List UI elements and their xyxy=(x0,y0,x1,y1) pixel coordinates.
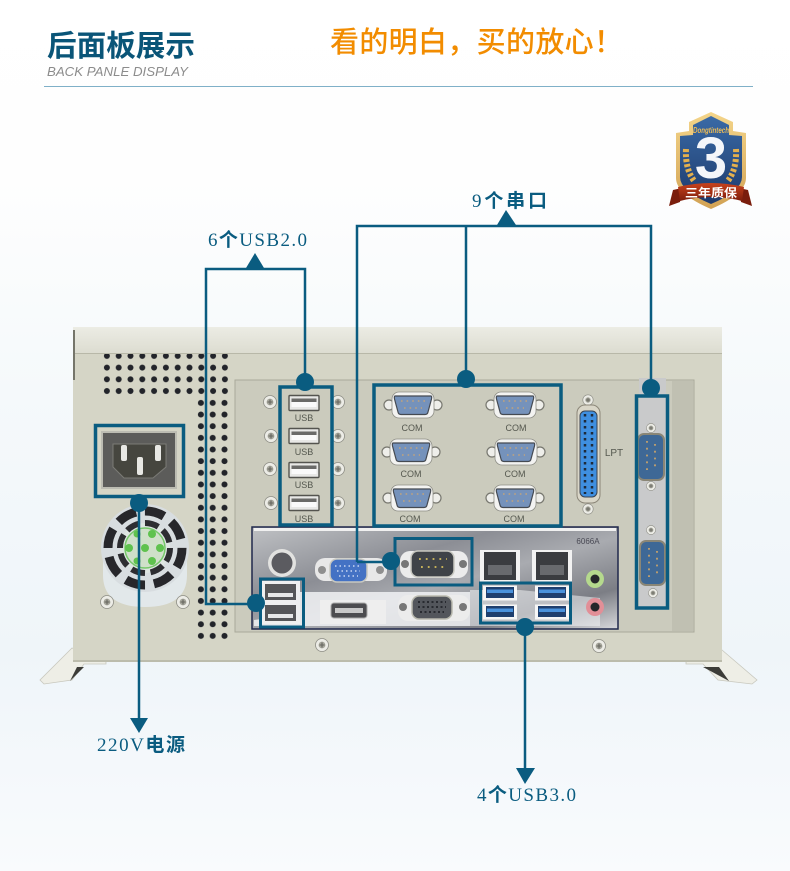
PS/2 port xyxy=(268,549,296,577)
VGA port blue xyxy=(315,558,387,582)
DB9 ports on expansion bracket xyxy=(638,423,665,598)
heading: back panel display: BACK PANLE DISPLAY xyxy=(47,64,189,79)
slogan: 看的明白，买的放心！ xyxy=(330,19,623,61)
callout: 220V power xyxy=(96,426,185,757)
ventilation holes xyxy=(101,350,231,641)
callout: 220V power: 220V电源 xyxy=(97,730,185,757)
COM ports: COM xyxy=(506,423,526,433)
callout: 6 USB 2.0 xyxy=(206,225,332,627)
COM ports: COM xyxy=(402,423,422,433)
icon: three-year warranty badge: Dongtintech xyxy=(693,126,729,135)
callout: 9 serial ports: 9个串口 xyxy=(472,186,547,213)
callout: 9 serial ports xyxy=(357,186,668,608)
COM ports xyxy=(382,392,545,524)
rear USB 2.0 stacked ports xyxy=(262,581,300,624)
fan xyxy=(100,504,190,608)
serial port dark xyxy=(400,551,468,578)
USB 2.0 front ports: USB xyxy=(295,447,313,457)
mounting foot left xyxy=(40,648,106,684)
VGA port dark xyxy=(398,595,470,621)
AC power socket xyxy=(101,431,177,489)
I/O shield: 6066A xyxy=(576,537,600,546)
USB 2.0 front ports: USB xyxy=(295,480,313,490)
I/O shield xyxy=(252,527,618,629)
USB 2.0 front ports: USB xyxy=(295,413,313,423)
icon: three-year warranty badge: 3 xyxy=(695,126,727,191)
LPT port xyxy=(577,395,623,514)
COM ports: COM xyxy=(400,514,420,524)
ethernet ports xyxy=(480,550,572,582)
COM ports: COM xyxy=(504,514,524,524)
HDMI port xyxy=(320,600,386,624)
screw on chassis bottom xyxy=(316,638,328,652)
chassis: rear view of the computer xyxy=(40,327,757,684)
heading: back panel display: 后面板展示 xyxy=(47,30,195,63)
icon: three-year warranty badge xyxy=(669,112,752,209)
COM ports: COM xyxy=(504,469,526,479)
callout: 4 USB 3.0: 4个USB3.0 xyxy=(477,780,576,807)
screw on chassis bottom right xyxy=(592,640,606,652)
audio jacks xyxy=(586,570,604,616)
heading: back panel display xyxy=(47,30,195,79)
callout: 4 USB 3.0 xyxy=(477,583,576,807)
expansion bracket xyxy=(639,378,666,610)
USB 3.0 ports xyxy=(483,586,569,620)
recessed panel xyxy=(235,380,694,632)
mounting foot right xyxy=(686,650,757,684)
LPT port: LPT xyxy=(605,448,623,459)
icon: three-year warranty badge: 三年质保 xyxy=(685,184,737,201)
callout: 6 USB 2.0: 6个USB2.0 xyxy=(208,225,307,252)
USB 2.0 front ports xyxy=(264,396,344,524)
USB 2.0 front ports: USB xyxy=(295,514,313,524)
COM ports: COM xyxy=(400,469,422,479)
